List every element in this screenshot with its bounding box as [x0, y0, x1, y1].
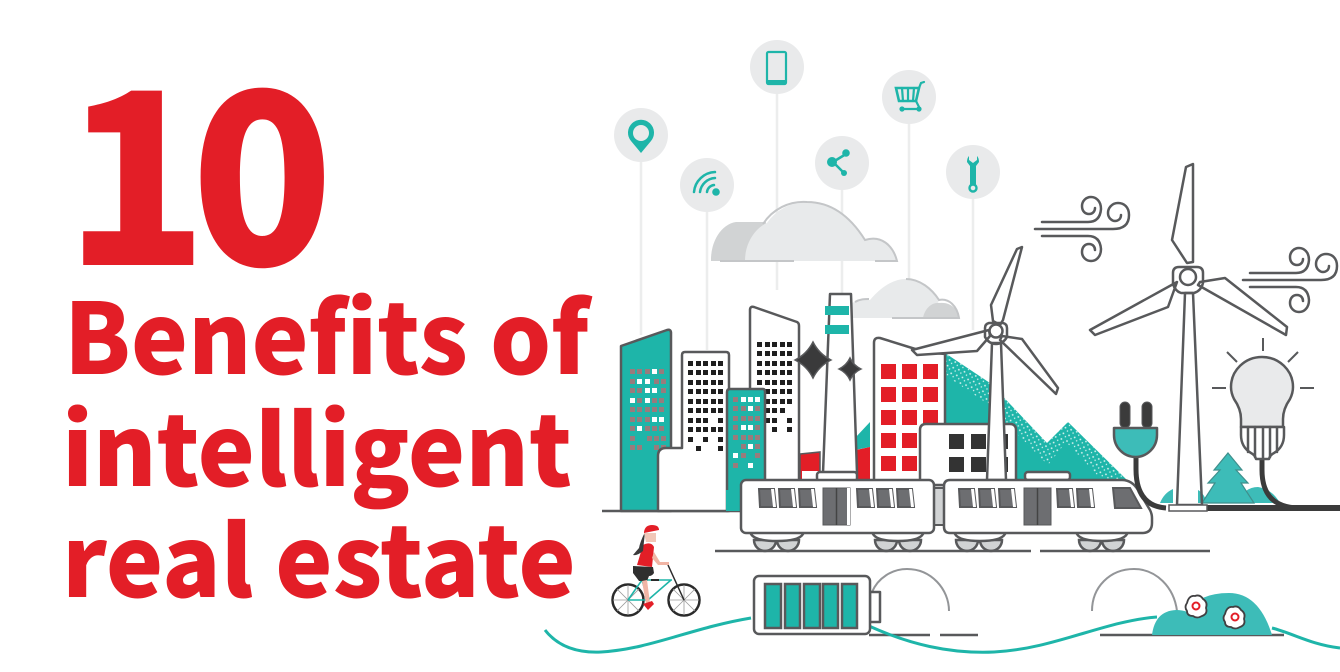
cloud: large — [711, 202, 897, 261]
icon: smartphone — [750, 40, 804, 94]
wind gust 1 — [1035, 197, 1129, 261]
title: Benefits of intelligent real estate: Benefits of — [64, 261, 593, 403]
red and teal blocks behind chimney — [800, 422, 870, 480]
building: small teal — [726, 389, 765, 511]
bush with flowers — [1152, 593, 1272, 635]
plug — [1114, 402, 1157, 457]
icon: shopping cart — [882, 70, 936, 124]
bulb light rays — [1212, 338, 1314, 388]
title: Benefits of intelligent real estate: intelligent — [62, 373, 572, 515]
building: red windows — [874, 338, 945, 485]
bushes and pine tree — [1160, 453, 1280, 503]
star sparks — [795, 342, 861, 380]
chimney — [817, 294, 857, 481]
wind turbine small — [912, 247, 1058, 480]
wind gust 2 — [1243, 248, 1337, 312]
connector stems — [641, 92, 973, 350]
title: Benefits of intelligent real estate: real estate — [62, 484, 576, 626]
ground line — [602, 510, 745, 512]
power cable — [1136, 457, 1340, 511]
building: white with black windows — [658, 352, 729, 511]
mountains with speckled edge — [945, 353, 1152, 512]
rails — [715, 550, 1210, 552]
ground segments — [869, 634, 1284, 636]
train car 2 — [944, 472, 1152, 551]
icon: wifi — [680, 158, 734, 212]
light bulb — [1231, 357, 1293, 459]
building: tall white — [750, 307, 799, 485]
battery — [754, 576, 880, 634]
wind turbine large — [1090, 164, 1287, 505]
building: low white — [920, 424, 1016, 485]
building: teal tower — [621, 330, 671, 511]
title: number 10: 10 — [65, 0, 334, 333]
cloud: small — [842, 279, 960, 318]
grey arcs — [872, 569, 1177, 611]
title: Benefits of intelligent real estate — [62, 261, 593, 626]
teal wave line — [545, 617, 1340, 652]
train car 1 — [741, 480, 947, 551]
icon: share — [815, 136, 869, 190]
icon: wrench — [946, 145, 1000, 199]
cyclist on bicycle — [612, 525, 700, 616]
icon: location pin — [614, 108, 668, 162]
